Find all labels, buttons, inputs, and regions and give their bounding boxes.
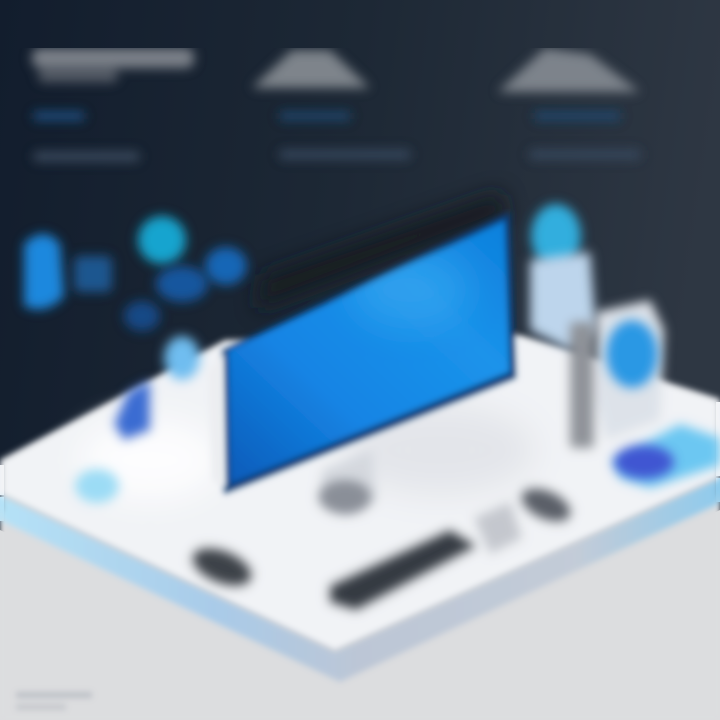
keyboard	[187, 482, 575, 610]
icon: center node	[156, 266, 208, 302]
screen highlight	[350, 250, 470, 330]
icon: tilted blue card	[114, 380, 150, 440]
tower blue window	[606, 320, 658, 388]
base platform edge right	[716, 478, 720, 502]
icon: light drop	[164, 336, 200, 380]
icon: lower node	[124, 301, 160, 331]
tower shaft	[570, 322, 594, 448]
keyboard light edge	[474, 502, 522, 554]
monitor back shadow	[256, 192, 508, 310]
icon: right node	[205, 247, 247, 285]
mouse	[517, 482, 575, 528]
desktop tower and accessories	[530, 204, 720, 488]
base platform edge left	[0, 497, 4, 521]
floating icons and network	[24, 216, 247, 503]
desk platform	[0, 335, 720, 682]
icon: floor glow	[75, 469, 119, 503]
base floor	[0, 510, 720, 720]
shaded top patch right	[345, 405, 535, 495]
blurred corner logo	[16, 692, 92, 710]
purple mat accent	[614, 445, 674, 479]
icon: connector block	[74, 256, 112, 292]
monitor white side	[208, 352, 226, 488]
blurred header text: middle column	[252, 50, 410, 159]
icon: left lock	[24, 234, 64, 309]
bottle cap	[531, 204, 581, 268]
blurred header text: left column	[32, 48, 194, 161]
monitor base	[319, 480, 371, 514]
platform top	[0, 335, 720, 652]
platform edge	[0, 476, 720, 682]
blue mat	[612, 424, 720, 488]
base platform strip left	[0, 465, 4, 495]
tower panel	[596, 300, 664, 440]
monitor	[208, 192, 516, 514]
floor	[0, 495, 720, 720]
keyboard body	[330, 530, 476, 610]
monitor screen	[228, 220, 510, 484]
monitor stand	[320, 450, 376, 514]
bottle body	[530, 252, 596, 350]
icon: cyan node	[138, 216, 186, 264]
bright top patch left	[80, 420, 220, 500]
monitor bezel	[222, 212, 516, 494]
speaker puck	[187, 541, 257, 593]
blurred header text: right column	[498, 48, 640, 159]
base platform strip right	[716, 402, 720, 476]
